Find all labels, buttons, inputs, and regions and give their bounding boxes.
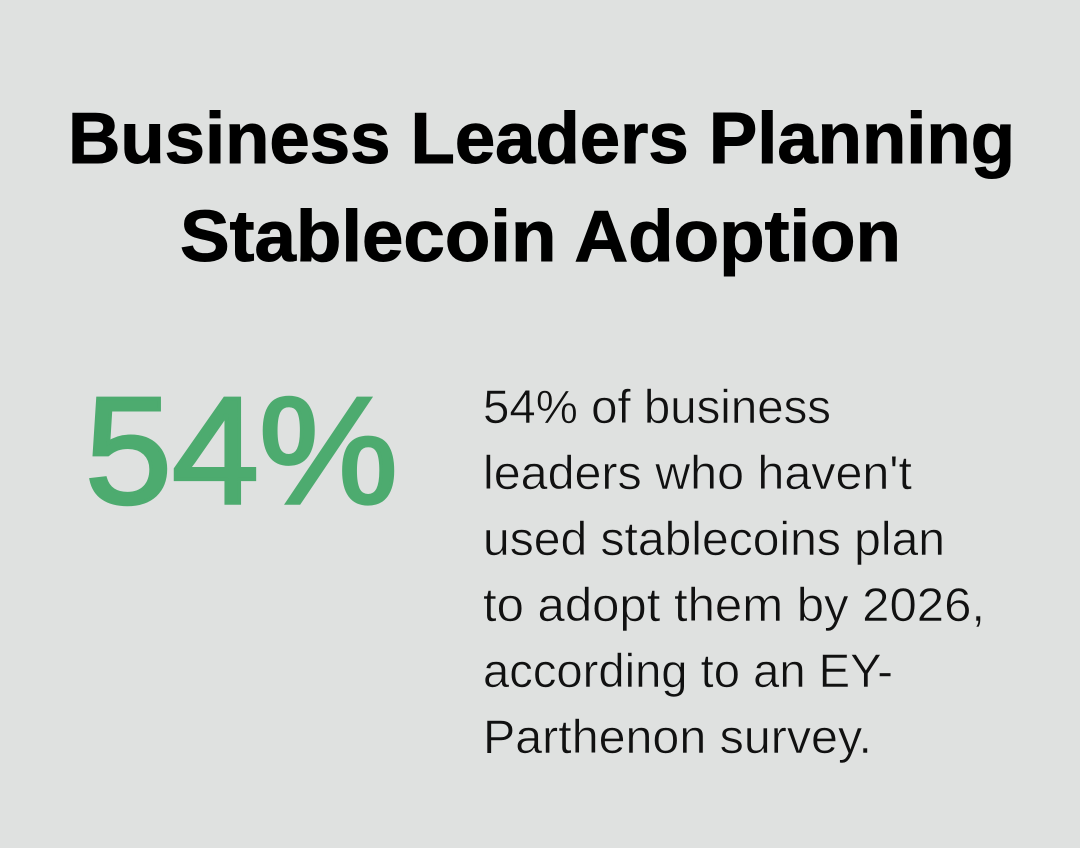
description text block: according to an EY- — [483, 644, 893, 697]
description text block: used stablecoins plan — [483, 512, 945, 565]
big statistic: 54%: 54% — [85, 366, 398, 536]
title — [68, 99, 1015, 277]
description text block: to adopt them by 2026, — [483, 578, 985, 631]
title: Business Leaders Planning — [68, 99, 1015, 179]
description text block — [483, 380, 985, 763]
description text block: Parthenon survey. — [483, 710, 872, 763]
description text block: leaders who haven't — [483, 446, 912, 499]
title: Stablecoin Adoption — [180, 197, 901, 277]
description text block: 54% of business — [483, 380, 831, 433]
